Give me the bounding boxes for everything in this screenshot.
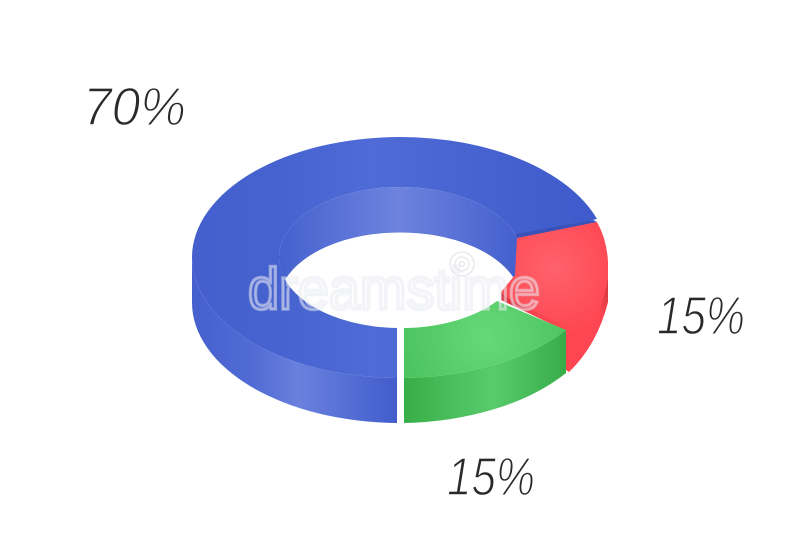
watermark text core: dreamstime bbox=[248, 257, 540, 322]
blue outer side wall bbox=[192, 258, 397, 423]
chart: 3D donut bbox=[192, 137, 608, 423]
segment: red 15% bbox=[501, 222, 608, 372]
watermark text outline: dreamstime bbox=[248, 257, 540, 322]
red inner wall shade bbox=[501, 292, 566, 331]
red body bbox=[501, 222, 608, 372]
watermark bbox=[248, 252, 540, 322]
watermark spiral bbox=[450, 252, 474, 276]
segment: green 15% bbox=[404, 301, 566, 423]
red outer side shade bbox=[569, 278, 608, 372]
segment: blue 70% bbox=[192, 137, 597, 423]
label: 15% right: 15% bbox=[657, 286, 745, 346]
green side wall bbox=[404, 330, 566, 423]
green top surface bbox=[404, 301, 566, 378]
blue shadow above red bbox=[516, 220, 597, 240]
blue inner wall bbox=[279, 187, 517, 280]
blue top surface bbox=[192, 137, 597, 378]
label: 15% bottom: 15% bbox=[447, 447, 535, 507]
label: 70%: 70% bbox=[83, 77, 186, 137]
